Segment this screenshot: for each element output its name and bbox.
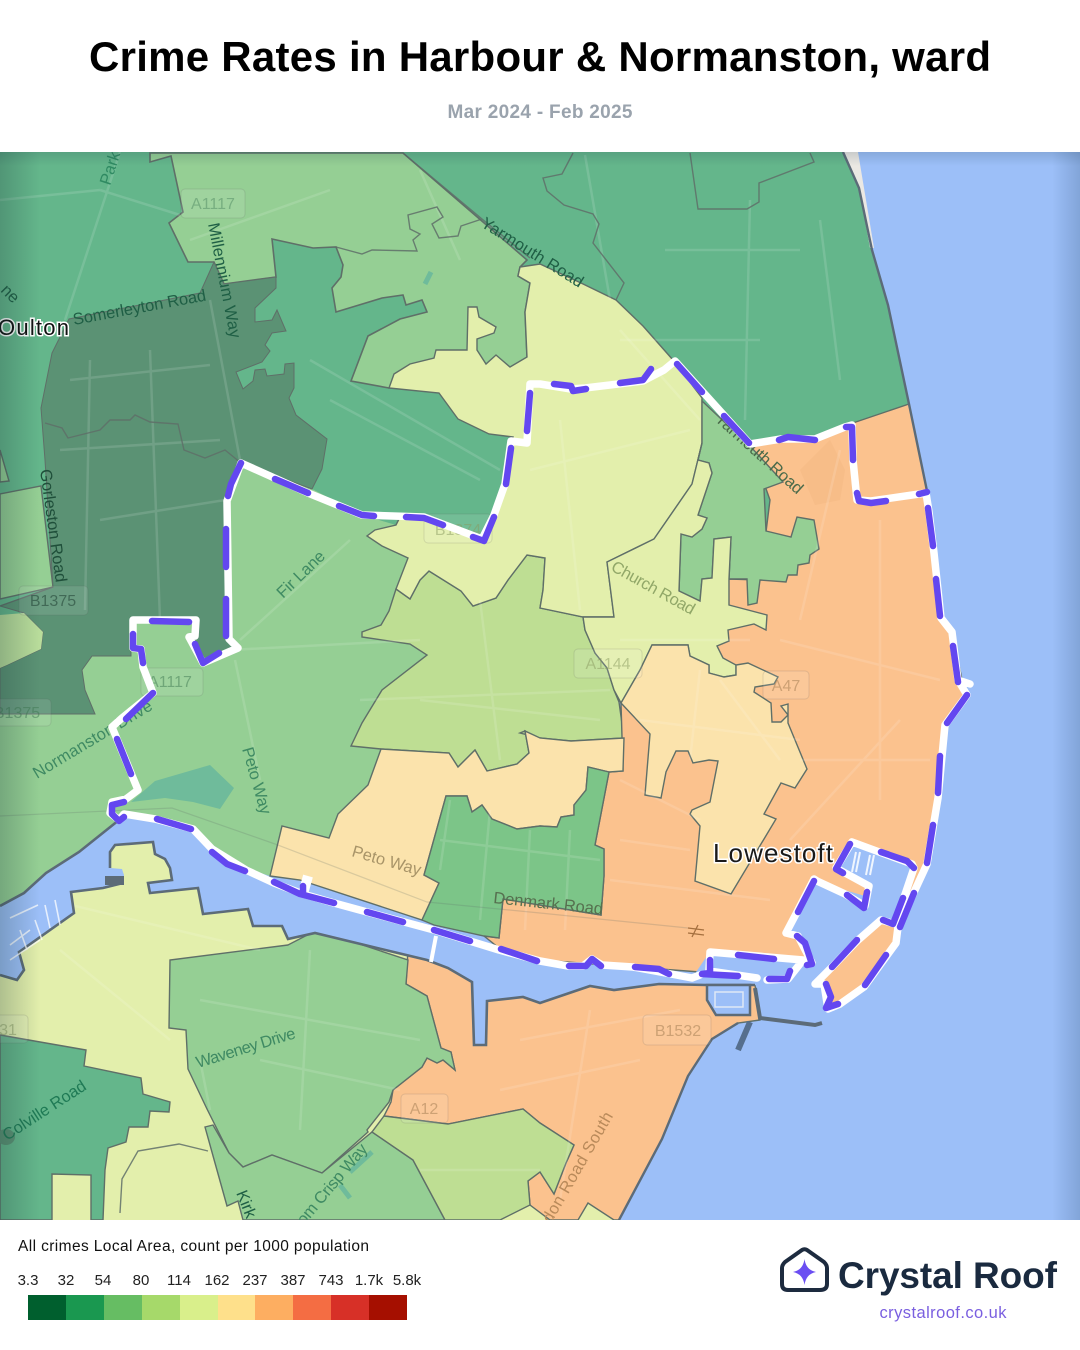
ward boundary: purple dashes — [112, 364, 967, 1008]
road label: Fir Lane: Fir Lane — [273, 547, 329, 602]
road badge: A1117 south: A1117 — [148, 674, 192, 691]
railway line — [0, 808, 688, 928]
road label: London Road South: don Road South — [539, 1109, 617, 1226]
road badge: B1375 — [19, 586, 88, 615]
ward boundary: white underlay — [110, 361, 970, 1009]
area: Crisp Way green — [205, 1125, 445, 1220]
road badge: B1532: B1532 — [655, 1023, 701, 1040]
road badge: B1532 — [643, 1015, 711, 1045]
road label: Normanston Drive: Normanston Drive — [30, 697, 156, 782]
legend scale labels: 162 — [204, 1272, 230, 1289]
place label: Oulton: Oulton — [0, 315, 69, 340]
river south bank outline — [0, 820, 755, 1045]
brand url: crystalroof.co.uk — [880, 1304, 1007, 1322]
subtitle: date range: Mar 2024 - Feb 2025 — [448, 102, 633, 123]
harbour marina basin — [707, 985, 750, 1015]
pier east — [755, 988, 822, 1025]
road badge: A1117 south — [141, 668, 203, 696]
marina pontoons harbour — [852, 852, 874, 875]
area: darker sand patch — [800, 440, 845, 505]
road badge: A47: A47 — [772, 678, 800, 695]
legend scale labels: 5.8k — [393, 1272, 422, 1289]
area: small ponds — [340, 272, 431, 1198]
area: small light patch west — [0, 613, 43, 668]
road label: Millennium Way: Millennium Way — [204, 221, 244, 340]
road label: Denmark Road: Denmark Road — [493, 889, 604, 918]
dock block — [105, 876, 124, 885]
road badge: A1117 north — [181, 189, 245, 218]
area: lime central — [351, 555, 624, 771]
title: Crime Rates in Harbour & Normanston, ward — [89, 33, 991, 80]
legend scale labels: 1.7k — [355, 1272, 384, 1289]
map — [0, 149, 1080, 1229]
road label: Peto Way east: Peto Way — [350, 843, 424, 880]
area: far west small patch — [0, 450, 9, 482]
road badge: A1144: A1144 — [585, 656, 631, 673]
internal boundary lines — [0, 153, 814, 1213]
legend scale labels: 114 — [167, 1272, 191, 1289]
road badge: B1375 west — [0, 699, 51, 726]
area: south pale yellow — [0, 843, 612, 1220]
legend title: All crimes Local Area, count per 1000 population — [18, 1238, 369, 1255]
road label: Gorleston Road: Gorleston Road — [36, 468, 70, 583]
road badge: B1375: B1375 — [30, 593, 76, 610]
legend scale labels: 387 — [280, 1272, 306, 1289]
area: south-west green with Fir Lane — [0, 463, 427, 906]
road label: Kirkley: Kirk — [232, 1188, 260, 1222]
river and harbour water — [0, 819, 914, 1045]
legend scale labels — [18, 1272, 422, 1289]
icon: railway station — [688, 925, 704, 937]
area: pale yellow central — [367, 264, 702, 617]
road badge: A12 — [401, 1094, 448, 1123]
area: peach east of centre — [621, 645, 807, 894]
road badge: B1374: B1374 — [435, 522, 481, 539]
area: green Denmark Road — [422, 767, 609, 938]
place label: Lowestoft: Lowestoft — [713, 838, 834, 868]
legend scale labels: 80 — [133, 1272, 149, 1289]
road label: Park Road: Park — [97, 149, 125, 187]
area: pond — [131, 765, 234, 809]
area: peach Peto Way — [270, 731, 624, 920]
road badge: A1144 — [574, 649, 642, 678]
area: small dark spot south-west — [0, 1129, 15, 1145]
legend scale labels: 54 — [95, 1272, 111, 1289]
road badge: partial west — [0, 1015, 28, 1043]
road label: Tom Crisp Way: om Crisp Way — [293, 1140, 372, 1229]
brand name: Crystal Roof — [838, 1255, 1058, 1296]
legend scale labels: 237 — [242, 1272, 268, 1289]
map vignette — [0, 152, 1080, 1220]
area: darkest green Oulton — [0, 262, 327, 714]
area: south orange — [384, 950, 760, 1220]
coastline — [619, 152, 927, 1220]
sea — [126, 152, 1080, 1220]
road labels — [0, 149, 807, 1229]
area: beach sliver — [843, 152, 874, 248]
road label: Colville Road: Colville Road — [0, 1077, 90, 1144]
legend scale labels: 32 — [58, 1272, 74, 1289]
area: western green strip — [0, 486, 53, 599]
pier south — [738, 1022, 750, 1050]
road badge: B1374 — [424, 514, 492, 543]
area: north-west light green — [150, 153, 540, 388]
marina pontoon — [715, 992, 743, 1007]
area: green patch east — [679, 401, 819, 605]
road label: Yarmouth Road east: Yarmouth Road — [711, 410, 807, 498]
area: orange east Lowestoft — [484, 404, 967, 1004]
road label: Somerleyton Road: Somerleyton Road — [71, 287, 207, 329]
road label: Waveney Drive: Waveney Drive — [194, 1024, 298, 1072]
area: Colville Road mid green — [0, 1035, 170, 1220]
road label: Church Road: Church Road — [608, 558, 698, 619]
road label: Yarmouth Road north: Yarmouth Road — [478, 214, 587, 291]
area: Waveney green — [169, 930, 455, 1173]
road label: Peto Way west: Peto Way — [238, 745, 275, 817]
area: south lime — [372, 1109, 574, 1220]
area: pale yellow Church Road — [583, 443, 767, 703]
icon: Crystal Roof house logo — [782, 1249, 827, 1290]
road network faint lines — [0, 152, 940, 1200]
legend scale labels: 3.3 — [18, 1272, 38, 1289]
road badge: A12: A12 — [410, 1101, 438, 1118]
road badge: A47 — [763, 671, 809, 699]
road badge: A1117 north: A1117 — [191, 196, 235, 213]
marina pontoons west — [10, 900, 60, 960]
legend colour bar — [28, 1295, 407, 1320]
area: northern land, mid green — [0, 152, 908, 615]
legend scale labels: 743 — [318, 1272, 344, 1289]
